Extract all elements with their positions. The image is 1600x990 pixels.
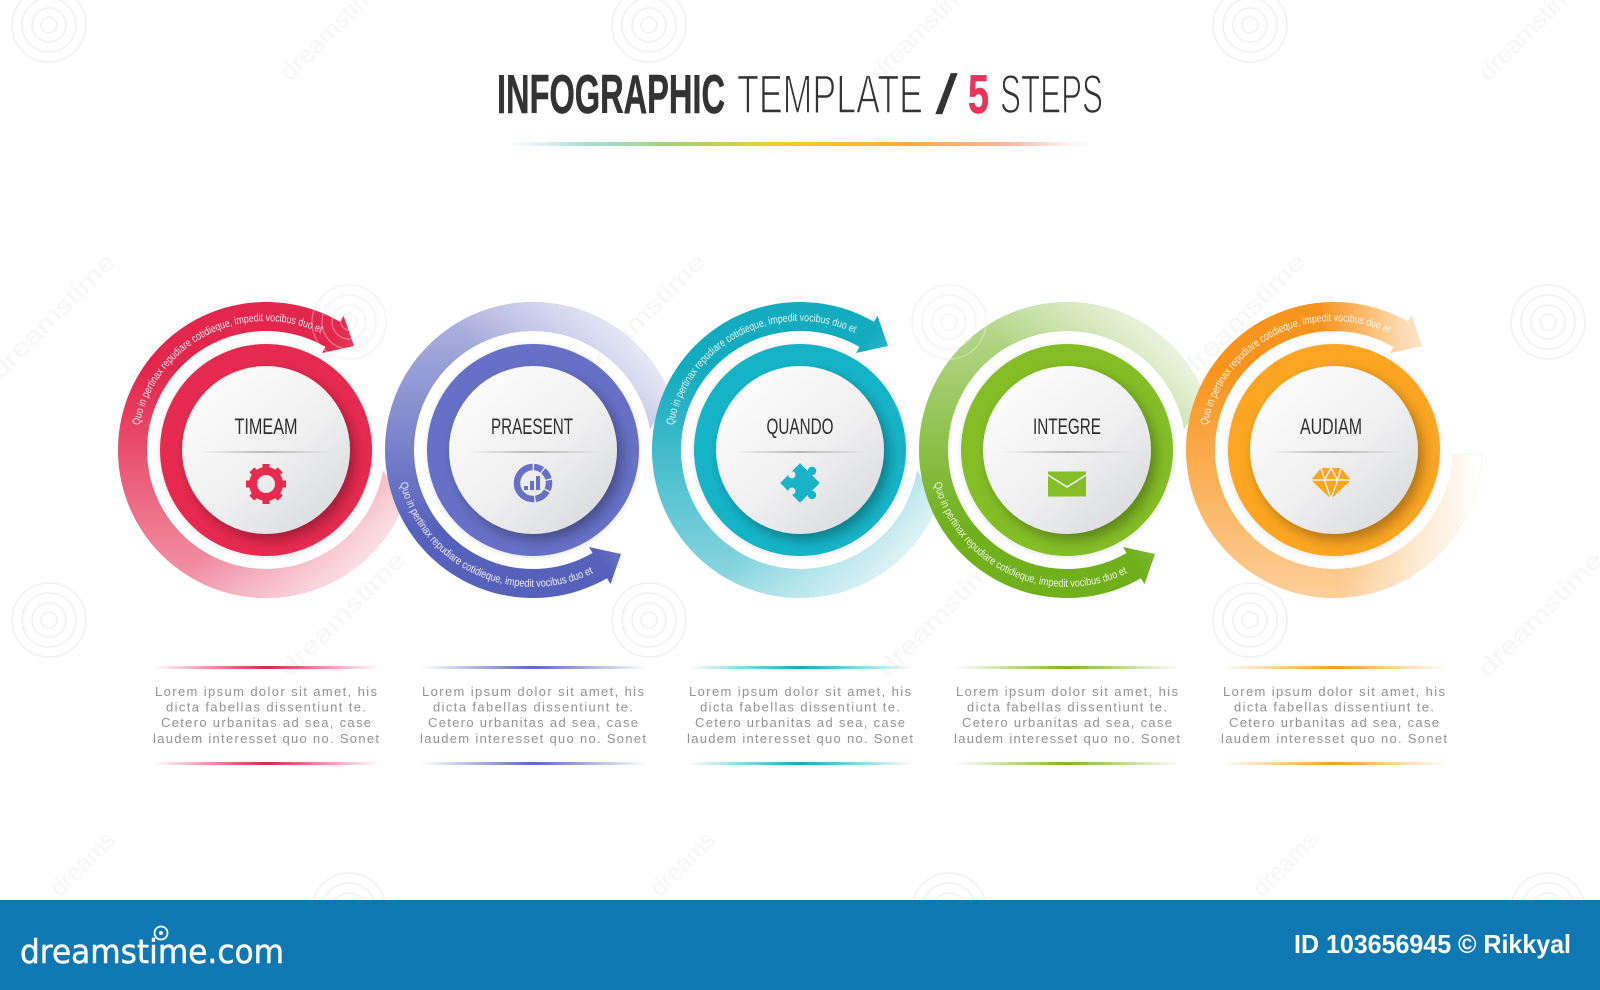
arrow band purple: [385, 302, 670, 598]
text block 3: Cetero urbanitas ad sea, case: [695, 715, 905, 730]
arrow band teal: [652, 302, 937, 598]
ring: [961, 344, 1173, 556]
text block 2: [420, 666, 647, 765]
ring: [694, 344, 906, 556]
disc: [1250, 366, 1418, 534]
text block 5: Lorem ipsum dolor sit amet, his: [1223, 684, 1446, 699]
text block 1: laudem interesset quo no. Sonet: [153, 731, 379, 746]
footer banner: [0, 900, 1600, 990]
ring: [1228, 344, 1440, 556]
step 3: QUANDO circle: [652, 302, 934, 598]
text: dreamstime: [575, 248, 711, 384]
text: dreams: [645, 827, 721, 902]
text block 1: dicta fabellas dissentiunt te.: [166, 700, 366, 714]
curved caption: Quo in pertinax repudiare cotidieque, impedit vocibus duo et: [132, 313, 323, 424]
title: [497, 63, 1103, 125]
icon: puzzle: [779, 457, 830, 509]
title: TEMPLATE: [737, 63, 923, 125]
text block 5: [1221, 666, 1448, 765]
text block 2: dicta fabellas dissentiunt te.: [433, 700, 633, 714]
curved caption: Quo in pertinax repudiare cotidieque, impedit vocibus duo et: [666, 313, 857, 424]
text block 4: Cetero urbanitas ad sea, case: [962, 715, 1172, 730]
label: TIMEAM: [234, 414, 298, 439]
text: dreamstime: [275, 546, 411, 682]
text block 1: Lorem ipsum dolor sit amet, his: [155, 684, 378, 699]
text block 4: Lorem ipsum dolor sit amet, his: [956, 684, 1178, 699]
disc: [983, 366, 1151, 534]
icon: gear: [246, 464, 286, 504]
text block 3: Lorem ipsum dolor sit amet, his: [689, 684, 912, 699]
step 5: AUDIAM circle: [1186, 302, 1482, 598]
text block 5: dicta fabellas dissentiunt te.: [1234, 700, 1434, 714]
dreamstime logo: dreamstime.com: [20, 932, 284, 971]
arrow band green: [919, 302, 1204, 598]
icon: chart donut: [516, 466, 550, 500]
step 4: INTEGRE circle: [918, 302, 1200, 598]
step 1: TIMEAM circle: [118, 302, 400, 598]
label: PRAESENT: [491, 414, 573, 439]
arrow band orange: [1186, 302, 1482, 598]
title: INFOGRAPHIC: [497, 63, 725, 125]
arrow band red: [118, 302, 403, 598]
curved caption: Quo in pertinax repudiare cotidieque, impedit vocibus duo et: [399, 482, 594, 588]
text block 2: Cetero urbanitas ad sea, case: [428, 715, 638, 730]
label: QUANDO: [766, 414, 834, 439]
curved caption: Quo in pertinax repudiare cotidieque, impedit vocibus duo et: [933, 482, 1128, 588]
title: /: [936, 63, 958, 125]
label: AUDIAM: [1300, 414, 1362, 439]
text: dreamstime: [1175, 248, 1311, 384]
text block 3: dicta fabellas dissentiunt te.: [700, 700, 900, 714]
icon: envelope: [1048, 472, 1086, 496]
text block 2: Lorem ipsum dolor sit amet, his: [422, 684, 644, 699]
ring: [160, 344, 372, 556]
text: dreams: [45, 827, 121, 902]
text block 2: laudem interesset quo no. Sonet: [420, 731, 646, 746]
text: dreamstime: [873, 546, 1009, 682]
image id credit: ID 103656945 © Rikkyal: [1294, 929, 1571, 959]
curved caption: Quo in pertinax repudiare cotidieque, impedit vocibus duo et: [1200, 313, 1391, 424]
text block 4: laudem interesset quo no. Sonet: [954, 731, 1180, 746]
text block 3: laudem interesset quo no. Sonet: [687, 731, 913, 746]
label: INTEGRE: [1033, 414, 1101, 439]
text block 3: [687, 666, 914, 765]
disc: [716, 366, 884, 534]
title underline: [504, 142, 1089, 146]
text block 5: Cetero urbanitas ad sea, case: [1229, 715, 1439, 730]
text block 5: laudem interesset quo no. Sonet: [1221, 731, 1447, 746]
disc: [182, 366, 350, 534]
title: 5: [968, 63, 989, 125]
text block 4: [954, 666, 1181, 765]
text block 1: Cetero urbanitas ad sea, case: [161, 715, 371, 730]
text: dreamstime: [1473, 546, 1600, 682]
text: dreams: [1247, 827, 1323, 902]
title: STEPS: [1000, 63, 1103, 125]
ring: [427, 344, 639, 556]
disc: [449, 366, 617, 534]
text block 1: [153, 666, 380, 765]
text block 4: dicta fabellas dissentiunt te.: [967, 700, 1167, 714]
step 2: PRAESENT circle: [384, 302, 666, 598]
icon: diamond: [1311, 468, 1351, 499]
